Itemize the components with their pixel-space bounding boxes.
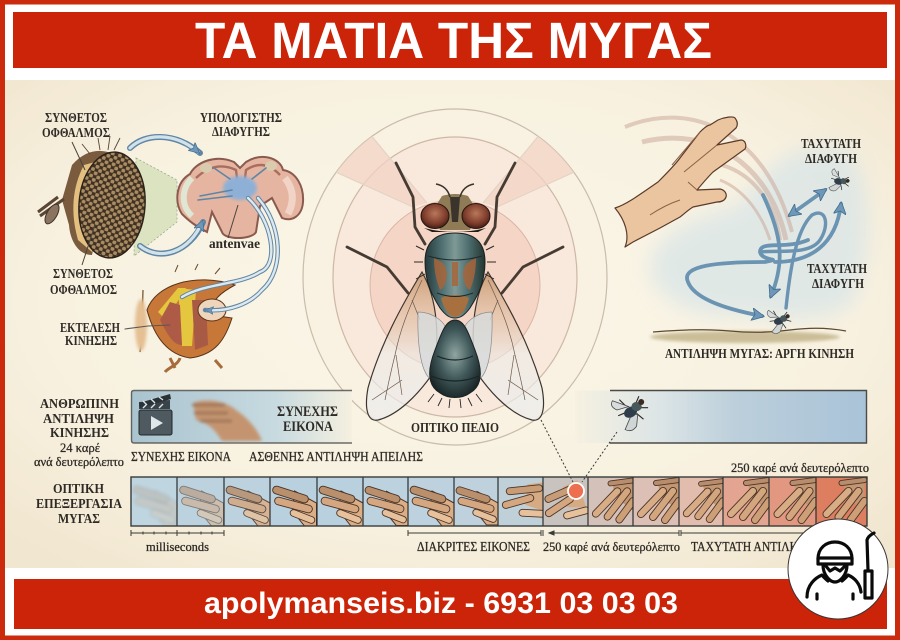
fly head and eyes — [421, 184, 490, 232]
label: optical field: ΟΠΤΙΚΟ ΠΕΔΙΟ — [411, 421, 499, 436]
illustration: fly body cross-section — [135, 264, 238, 372]
timing scales: 250 καρέ ανά δευτερόλεπτο — [543, 539, 680, 554]
ground — [650, 328, 846, 343]
escape labels — [665, 137, 867, 362]
blue cloud — [650, 146, 868, 319]
escape flight arrows — [687, 190, 841, 316]
captions under human bar: ΑΣΘΕΝΗΣ ΑΝΤΙΛΗΨΗ ΑΠΕΙΛΗΣ — [249, 450, 423, 465]
escape labels: ΤΑΧΥΤΑΤΗ — [801, 137, 861, 152]
row labels: ΑΝΘΡΩΠΙΝΗ — [40, 397, 119, 412]
title: ΤΑ ΜΑΤΙΑ ΤΗΣ ΜΥΓΑΣ — [195, 12, 712, 69]
eye and brain labels: ΣΥΝΘΕΤΟΣ — [45, 111, 107, 126]
callout: impact point — [568, 483, 584, 499]
footer banner — [14, 579, 887, 629]
row labels: ΚΙΝΗΣΗΣ — [50, 426, 109, 441]
eye and brain labels — [42, 111, 282, 349]
fly abdomen — [428, 320, 482, 408]
eye and brain labels: ΟΦΘΑΛΜΟΣ — [50, 283, 117, 298]
row labels: ΕΠΕΞΕΡΓΑΣΙΑ — [36, 497, 123, 512]
panel: hand strike and fly escape — [615, 117, 868, 362]
eye and brain labels: ΟΦΘΑΛΜΟΣ — [42, 126, 110, 141]
panel: human perception bar — [131, 390, 866, 443]
row labels: ΟΠΤΙΚΗ — [53, 482, 104, 497]
arrows: brain to body — [125, 198, 278, 329]
row labels: 24 καρέ — [60, 440, 101, 455]
captions under human bar: ΣΥΝΕΧΗΣ ΕΙΚΟΝΑ — [131, 450, 232, 465]
pointer lines — [72, 142, 95, 265]
label line: antennae — [228, 205, 238, 238]
captions under human bar — [131, 450, 869, 475]
fly left wing — [366, 272, 447, 420]
panel: field of view circles — [303, 109, 607, 445]
brain illustration — [177, 157, 303, 238]
row labels: ΑΝΤΙΛΗΨΗ — [43, 412, 114, 427]
timing scales: milliseconds — [146, 539, 209, 554]
captions under human bar: 250 καρέ ανά δευτερόλεπτο — [731, 460, 869, 475]
fly right wing — [463, 272, 544, 420]
icon: escaping fly — [822, 166, 853, 197]
eye and brain labels: ΚΙΝΗΣΗΣ — [65, 334, 117, 349]
logo: pest control technician — [788, 519, 888, 619]
bar text: ΕΙΚΟΝΑ — [283, 419, 333, 435]
row labels: ανά δευτερόλεπτο — [34, 454, 124, 469]
fly thorax — [414, 233, 496, 318]
eye and brain labels: ΔΙΑΦΥΓΗΣ — [212, 125, 270, 140]
icon: fly in bar — [611, 396, 648, 431]
icon: hand — [615, 117, 746, 247]
frame hands — [137, 477, 864, 526]
row labels: ΜΥΓΑΣ — [58, 512, 100, 527]
footer contact: apolymanseis.biz - 6931 03 03 03 — [204, 587, 678, 620]
escape labels: ΤΑΧΥΤΑΤΗ — [807, 262, 867, 277]
timing scales: ΤΑΧΥΤΑΤΗ ΑΝΤΙΛΗΨΗ — [691, 540, 815, 555]
panel: compound eye to brain diagram — [38, 111, 303, 372]
icon: fly on ground — [762, 307, 793, 337]
escape labels: ΔΙΑΦΥΓΗ — [805, 152, 857, 167]
escape labels: ΔΙΑΦΥΓΗ — [812, 277, 864, 292]
eye and brain labels: ΕΚΤΕΛΕΣΗ — [60, 321, 120, 336]
eye and brain labels: ΥΠΟΛΟΓΙΣΤΗΣ — [200, 111, 282, 126]
arrows: eye to brain — [130, 137, 266, 254]
escape labels: ΑΝΤΙΛΗΨΗ ΜΥΓΑΣ: ΑΡΓΗ ΚΙΝΗΣΗ — [665, 347, 854, 362]
bar text — [277, 404, 338, 435]
title banner — [13, 12, 887, 69]
illustration: central fly — [347, 163, 563, 420]
visual cone — [134, 158, 177, 256]
bar text: ΣΥΝΕΧΗΣ — [277, 404, 338, 420]
icon: clapperboard — [139, 394, 172, 435]
timing scales — [131, 530, 830, 555]
eye and brain labels: ΣΥΝΘΕΤΟΣ — [53, 267, 113, 282]
eye and brain labels: antenvae — [209, 237, 260, 252]
timing scales: ΔΙΑΚΡΙΤΕΣ ΕΙΚΟΝΕΣ — [417, 540, 530, 555]
fly legs — [347, 163, 563, 293]
panel: fly frame strip — [131, 477, 867, 526]
parchment background — [5, 80, 895, 568]
blurred hand — [192, 400, 262, 441]
dotted callout lines — [541, 420, 617, 482]
motion arcs — [625, 118, 792, 240]
icon: compound eye — [38, 136, 149, 260]
row labels — [34, 397, 124, 527]
